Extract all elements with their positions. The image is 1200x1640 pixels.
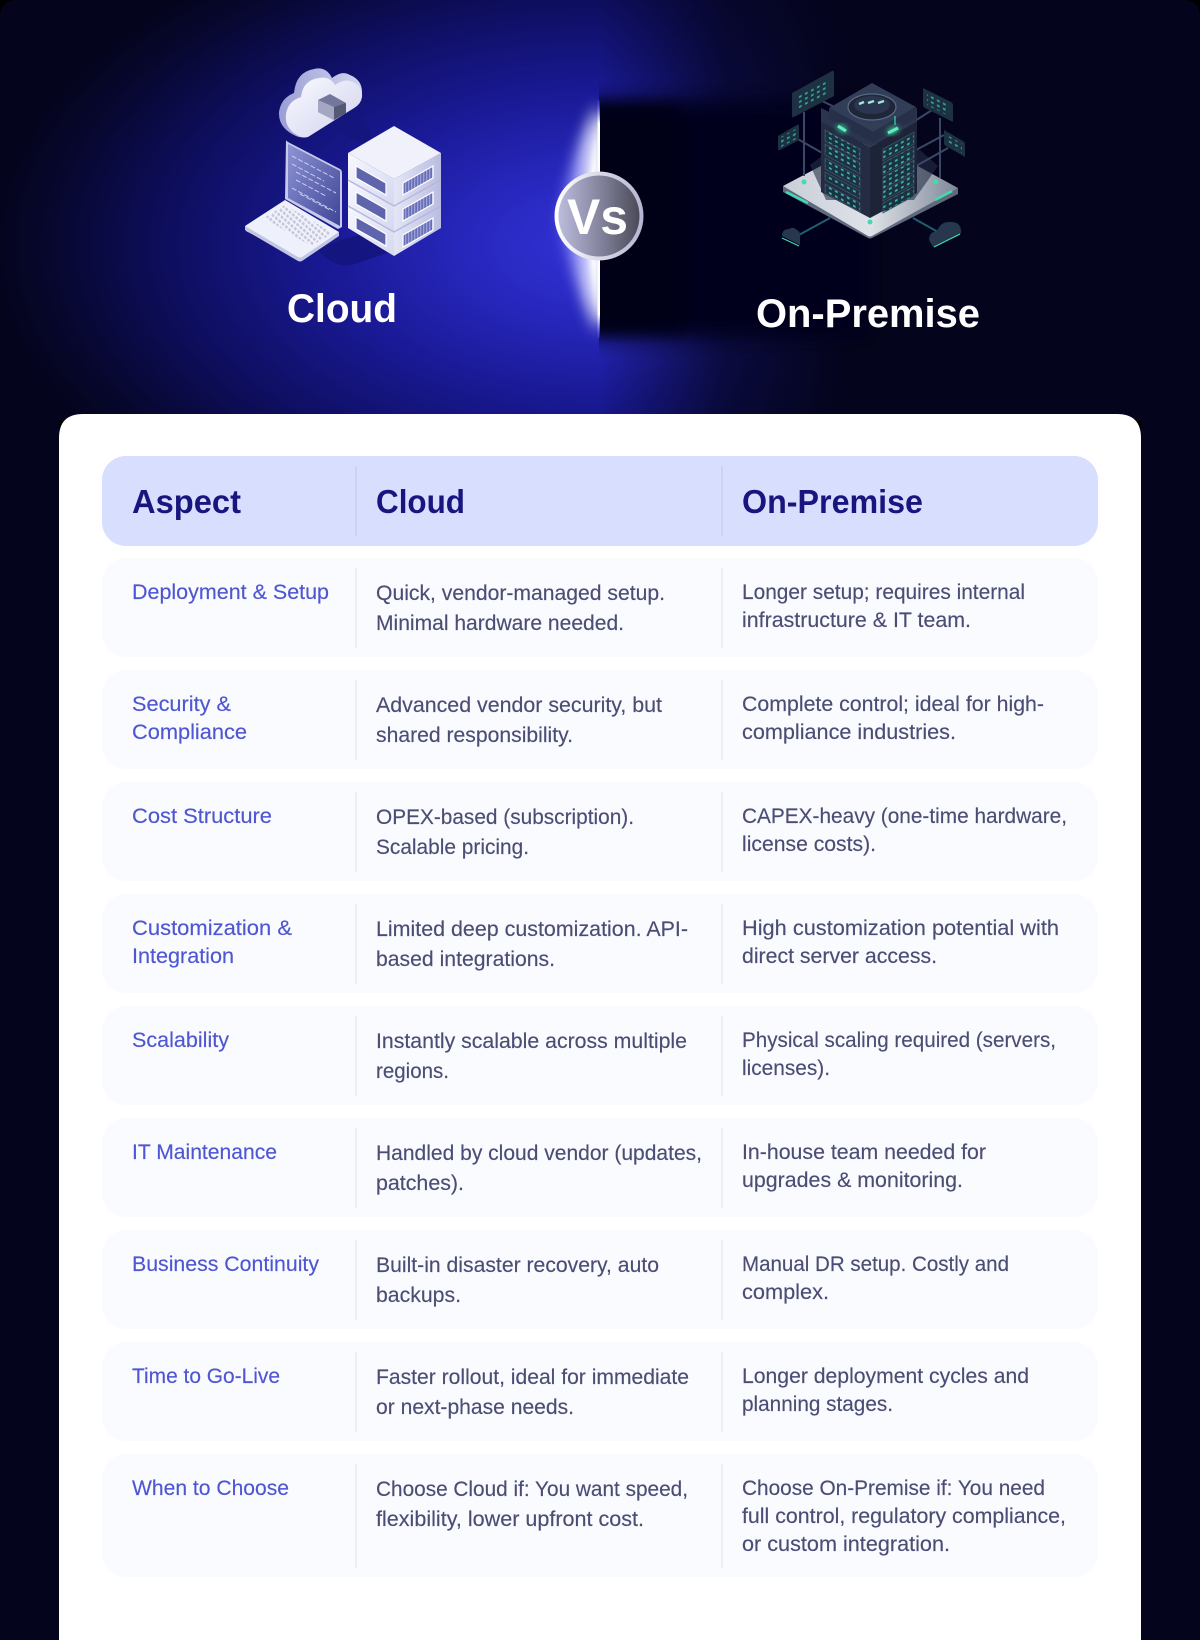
icon: tower body with server racks bbox=[802, 83, 938, 224]
row: IT Maintenance: IT Maintenance bbox=[132, 1141, 277, 1164]
row: Cost Structure: OPEX-based (subscription). bbox=[376, 806, 634, 829]
row: Deployment & Setup: Quick, vendor-managed setup. bbox=[376, 582, 665, 605]
icon: cloud bbox=[279, 68, 362, 138]
icon: on-premise server tower illustration bbox=[778, 71, 965, 247]
row: Customization & Integration: direct server access. bbox=[742, 945, 937, 968]
row: IT Maintenance bbox=[134, 1128, 986, 1208]
row: When to Choose: flexibility, lower upfront cost. bbox=[376, 1508, 644, 1531]
row: Scalability: licenses). bbox=[742, 1057, 830, 1080]
row: Deployment & Setup bbox=[134, 568, 1024, 648]
row: Time to Go-Live: Faster rollout, ideal for immediate bbox=[376, 1366, 689, 1389]
row: Scalability bbox=[132, 1016, 1054, 1096]
row: Customization & Integration: Integration bbox=[132, 945, 234, 968]
row: When to Choose: When to Choose bbox=[132, 1477, 289, 1500]
table header row bbox=[102, 456, 1098, 546]
row: Security & Compliance: compliance industries. bbox=[742, 721, 956, 744]
row: When to Choose: or custom integration. bbox=[742, 1533, 950, 1556]
panel: comparison table card bbox=[59, 414, 1141, 1640]
row: Deployment & Setup: Minimal hardware needed. bbox=[376, 612, 624, 635]
row: Scalability: Instantly scalable across multiple bbox=[376, 1030, 687, 1053]
icon: base plate bbox=[783, 140, 958, 238]
icon: shadows bbox=[318, 127, 388, 266]
heading: On-Premise: On-Premise bbox=[742, 483, 923, 520]
background: dark navy header with blue glow bbox=[0, 0, 1200, 420]
row: Business Continuity: Built-in disaster recovery, auto bbox=[376, 1254, 659, 1277]
row: Business Continuity: backups. bbox=[376, 1284, 461, 1307]
row: Business Continuity: Business Continuity bbox=[132, 1253, 319, 1276]
icon: cloud illustration with laptop and server stack bbox=[245, 68, 441, 265]
row: Security & Compliance bbox=[132, 680, 1044, 760]
row: IT Maintenance: In-house team needed for bbox=[742, 1141, 986, 1164]
row: Security & Compliance: Complete control; ideal for high- bbox=[742, 693, 1044, 716]
row: Time to Go-Live: Longer deployment cycles and bbox=[742, 1365, 1029, 1388]
row: Customization & Integration: High customization potential with bbox=[742, 917, 1059, 940]
row: Security & Compliance: Advanced vendor security, but bbox=[376, 694, 662, 717]
title: On-Premise: On-Premise bbox=[756, 292, 980, 336]
title: Cloud: Cloud bbox=[287, 287, 397, 331]
row: Time to Go-Live: or next-phase needs. bbox=[376, 1396, 574, 1419]
row: IT Maintenance: patches). bbox=[376, 1172, 464, 1195]
row: Customization & Integration: Customization & bbox=[132, 917, 292, 940]
row: IT Maintenance: upgrades & monitoring. bbox=[742, 1169, 963, 1192]
row: Security & Compliance: Security & bbox=[132, 693, 231, 716]
row: Time to Go-Live: Time to Go-Live bbox=[132, 1365, 280, 1388]
row: When to Choose: Choose Cloud if: You want speed, bbox=[376, 1478, 688, 1501]
row: Customization & Integration bbox=[133, 904, 1058, 984]
row: Scalability: Physical scaling required (servers, bbox=[742, 1029, 1056, 1052]
row: Security & Compliance: Compliance bbox=[132, 721, 247, 744]
row: Scalability: regions. bbox=[376, 1060, 449, 1083]
icon: laptop bbox=[245, 141, 342, 262]
row: When to Choose bbox=[132, 1464, 1064, 1568]
row: Cost Structure: license costs). bbox=[742, 833, 876, 856]
heading: Cloud: Cloud bbox=[376, 483, 465, 520]
row: Deployment & Setup: Longer setup; requires internal bbox=[742, 581, 1025, 604]
row: When to Choose: full control, regulatory compliance, bbox=[742, 1505, 1066, 1528]
row: IT Maintenance: Handled by cloud vendor (updates, bbox=[376, 1142, 702, 1165]
row: When to Choose: Choose On-Premise if: You need bbox=[742, 1477, 1045, 1500]
row: Cost Structure: Scalable pricing. bbox=[376, 836, 529, 859]
row: Cost Structure: Cost Structure bbox=[132, 805, 272, 828]
row: Business Continuity: Manual DR setup. Costly and bbox=[742, 1253, 1009, 1276]
row: Business Continuity: complex. bbox=[742, 1281, 829, 1304]
row: Scalability: Scalability bbox=[132, 1029, 230, 1052]
row: Deployment & Setup: Deployment & Setup bbox=[132, 581, 329, 604]
row: Customization & Integration: based integrations. bbox=[376, 948, 555, 971]
row: Deployment & Setup: infrastructure & IT team. bbox=[742, 609, 971, 632]
icon: wires and floating data panels bbox=[778, 71, 965, 178]
row: Business Continuity bbox=[134, 1240, 1008, 1320]
heading: Aspect: Aspect bbox=[132, 483, 241, 520]
icon: Vs badge: Vs bbox=[567, 189, 628, 245]
row: Time to Go-Live: planning stages. bbox=[742, 1393, 893, 1416]
row: Cost Structure: CAPEX-heavy (one-time hardware, bbox=[742, 805, 1067, 828]
icon: cable lines and clouds bbox=[782, 218, 961, 247]
row: Cost Structure bbox=[133, 792, 1066, 872]
icon: server stack bbox=[348, 126, 441, 256]
icon: Vs badge bbox=[554, 172, 644, 260]
row: Security & Compliance: shared responsibility. bbox=[376, 724, 573, 747]
row: Time to Go-Live bbox=[132, 1352, 1028, 1432]
row: Customization & Integration: Limited deep customization. API- bbox=[376, 918, 688, 941]
